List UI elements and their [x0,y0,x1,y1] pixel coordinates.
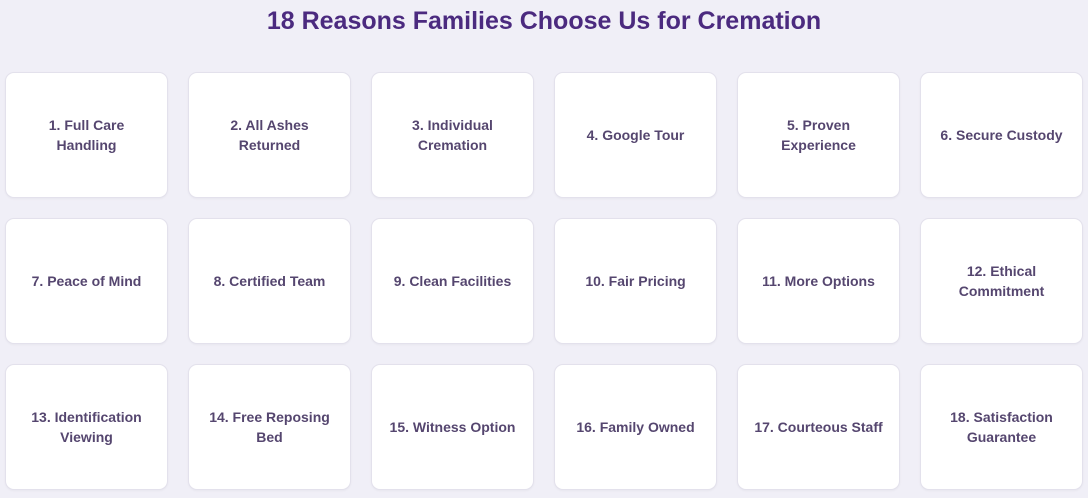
card 14 [188,364,351,490]
card 3 [371,72,534,198]
card 9 [371,218,534,344]
card 6 [920,72,1083,198]
card 16: 16. Family Owned [576,419,695,435]
card 15 [371,364,534,490]
card 10 [554,218,717,344]
card 13 [5,364,168,490]
card 14: 14. Free Reposing [209,409,330,425]
card 13: 13. Identification [31,409,142,425]
card 4: 4. Google Tour [587,127,684,143]
card 7 [5,218,168,344]
card 12: 12. Ethical [967,263,1036,279]
card 1: 1. Full Care [49,117,124,133]
card 12: Commitment [959,283,1044,299]
card 8 [188,218,351,344]
card 1: Handling [57,137,116,153]
card 15: 15. Witness Option [390,419,515,435]
card 11 [737,218,900,344]
card 10: 10. Fair Pricing [585,273,686,289]
card 5: 5. Proven [787,117,850,133]
card 2 [188,72,351,198]
card 16 [554,364,717,490]
card 7: 7. Peace of Mind [32,273,141,289]
card 12 [920,218,1083,344]
card 3: 3. Individual [412,117,493,133]
card 14: Bed [256,429,283,445]
card 8: 8. Certified Team [214,273,325,289]
card 5 [737,72,900,198]
card 5: Experience [781,137,856,153]
card 2: 2. All Ashes [230,117,309,133]
card 4 [554,72,717,198]
card 18: Guarantee [967,429,1036,445]
card 2: Returned [239,137,300,153]
card 17: 17. Courteous Staff [754,419,883,435]
card 17 [737,364,900,490]
card 13: Viewing [60,429,113,445]
card 18 [920,364,1083,490]
card 6: 6. Secure Custody [940,127,1063,143]
card 11: 11. More Options [762,273,875,289]
card 18: 18. Satisfaction [950,409,1053,425]
card 9: 9. Clean Facilities [394,273,511,289]
title: 18 Reasons Families Choose Us for Cremation [267,7,821,35]
card 3: Cremation [418,137,487,153]
card 1 [5,72,168,198]
